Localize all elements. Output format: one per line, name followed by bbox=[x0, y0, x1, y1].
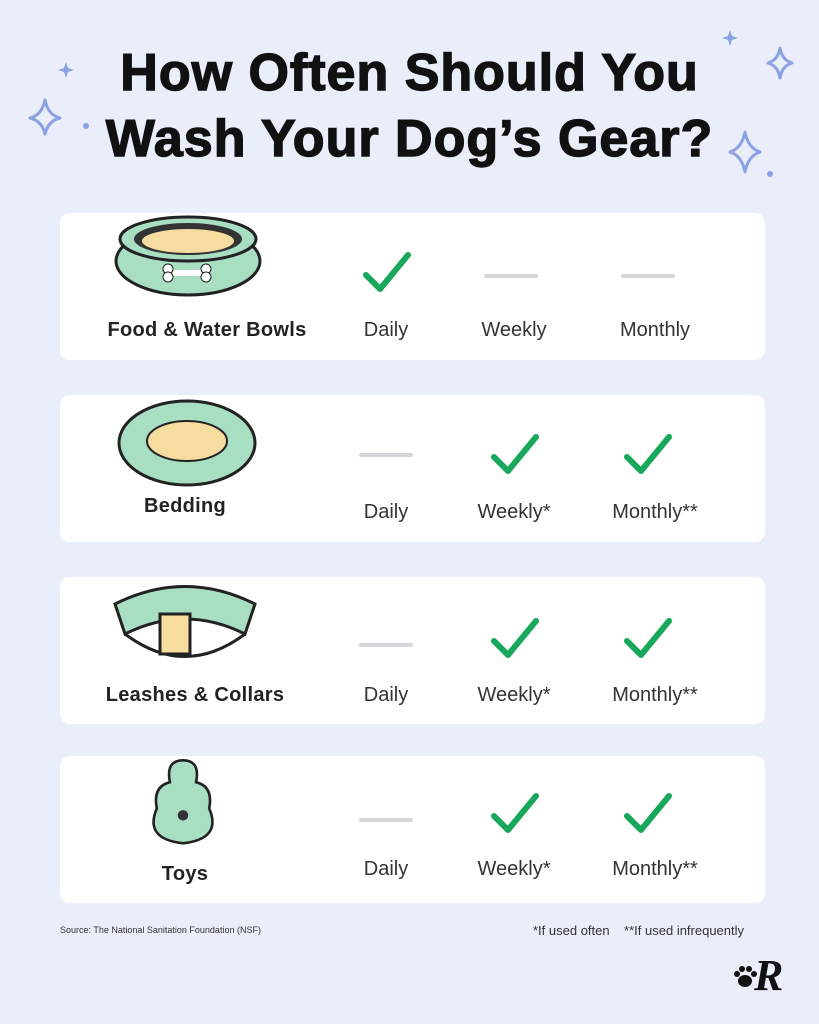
label: Food & Water Bowls bbox=[107, 319, 307, 341]
title: Wash Your Dog’s Gear? bbox=[106, 110, 713, 168]
title: How Often Should You bbox=[120, 44, 699, 102]
panel: leashes & collars: Daily bbox=[364, 684, 408, 706]
panel: toys: Daily bbox=[364, 858, 408, 880]
panel: toys: Weekly* bbox=[478, 858, 550, 880]
panel: bedding bbox=[60, 395, 765, 542]
panel: leashes & collars: Weekly* bbox=[478, 684, 550, 706]
label: Toys bbox=[162, 863, 208, 885]
panel: bedding: Weekly* bbox=[478, 501, 550, 523]
check weekly bbox=[491, 793, 539, 833]
panel: food & water bowls: Monthly bbox=[620, 319, 690, 341]
check daily bbox=[363, 252, 411, 292]
panel: leashes & collars bbox=[60, 577, 765, 724]
panel: food & water bowls: Weekly bbox=[481, 319, 547, 341]
footnotes: *If used often **If used infrequently bbox=[533, 923, 744, 938]
icon: toy bbox=[152, 759, 214, 845]
check monthly bbox=[624, 618, 672, 658]
panel: food & water bowls bbox=[60, 213, 765, 360]
icon: bowl bbox=[114, 216, 262, 296]
icon: bed bbox=[118, 400, 256, 486]
panel: toys: Monthly** bbox=[612, 858, 698, 880]
panel: bedding: Monthly** bbox=[612, 501, 698, 523]
source note: Source: The National Sanitation Foundation (NSF) bbox=[60, 925, 261, 935]
icon: collar bbox=[113, 585, 257, 658]
logo: R bbox=[754, 951, 783, 1000]
sparkles decoration bbox=[28, 30, 794, 177]
panel: toys bbox=[60, 756, 765, 903]
panel: bedding: Daily bbox=[364, 501, 408, 523]
panel: leashes & collars: Monthly** bbox=[612, 684, 698, 706]
label: Leashes & Collars bbox=[106, 684, 284, 706]
panel: food & water bowls: Daily bbox=[364, 319, 408, 341]
logo bbox=[734, 951, 783, 1000]
label: Bedding bbox=[144, 495, 226, 517]
check monthly bbox=[624, 434, 672, 474]
check weekly bbox=[491, 618, 539, 658]
check monthly bbox=[624, 793, 672, 833]
check weekly bbox=[491, 434, 539, 474]
title bbox=[104, 44, 713, 168]
